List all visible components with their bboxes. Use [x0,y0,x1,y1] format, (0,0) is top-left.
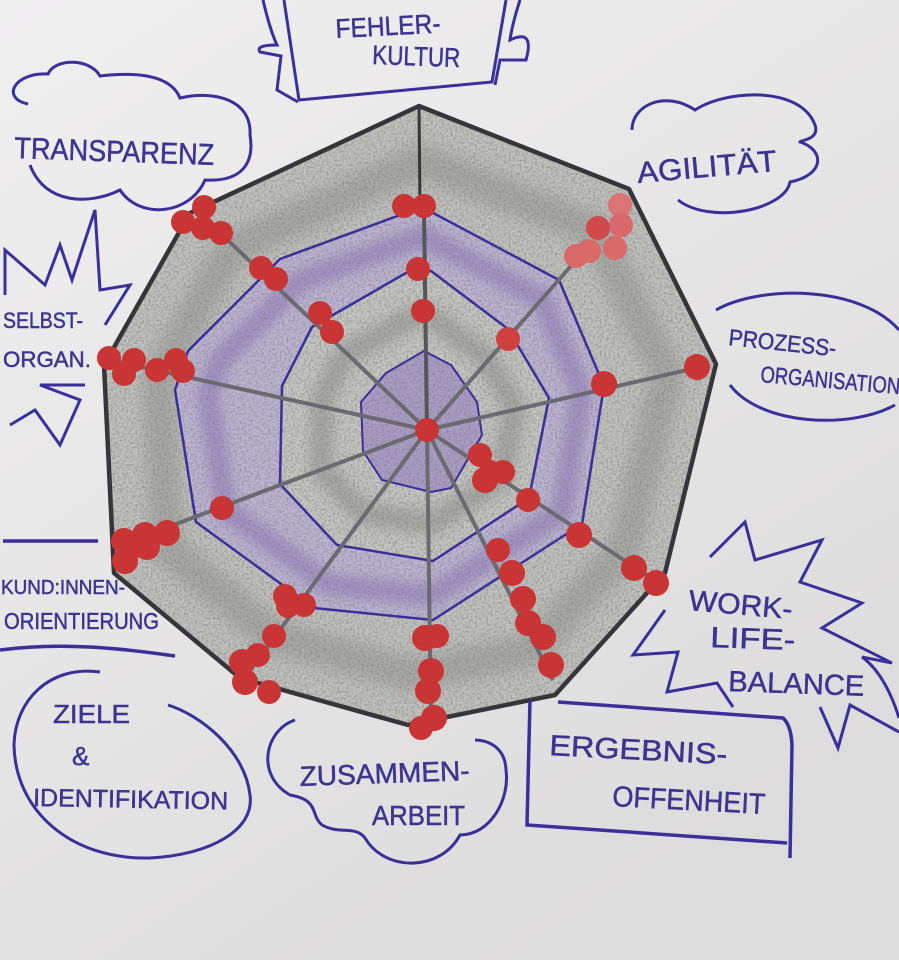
label: Ergebnisoffenheit: ERGEBNIS- [549,730,728,771]
label: Transparenz [13,62,251,210]
label: Work-Life-Balance: LIFE- [710,622,796,657]
pencil grain [100,100,720,730]
label: Ziele und Identifikation [14,671,250,858]
label: Selbstorganisation: SELBST- [3,308,83,333]
label: Agilität: AGILITÄT [636,145,778,190]
label: Prozessorganisation: PROZESS- [727,324,838,361]
label: Kund:innenorientierung: KUND:INNEN- [1,577,125,599]
label: Ziele und Identifikation: IDENTIFIKATION [33,784,228,815]
center purple area [361,351,482,492]
inner gray band [282,272,548,560]
purple band [176,213,601,618]
label: Zusammenarbeit [268,720,507,863]
red sticky dots [97,193,710,740]
label: Zusammenarbeit: ZUSAMMEN- [299,755,470,792]
label: Fehlerkultur: KULTUR [372,40,461,73]
label: Selbstorganisation: ORGAN. [3,347,91,372]
label: Zusammenarbeit: ARBEIT [372,800,465,831]
axes [110,106,700,725]
outer border [104,106,716,725]
label: Work-Life-Balance: WORK- [687,585,794,626]
label: Fehlerkultur: FEHLER- [335,9,441,44]
label: Ergebnisoffenheit [527,700,792,858]
label: Fehlerkultur [259,0,528,102]
label: Work-Life-Balance [633,522,899,748]
ring outlines [175,207,604,620]
label: Kund:innenorientierung [0,541,175,656]
outer gray band [106,109,714,722]
label: Agilität [632,95,818,213]
label: Ziele und Identifikation: ZIELE [53,699,130,729]
radar chart [90,90,730,740]
label: Work-Life-Balance: BALANCE [728,666,865,703]
label: Kund:innenorientierung: ORIENTIERUNG [4,608,159,634]
label: Ziele und Identifikation: & [72,741,89,771]
label: Ergebnisoffenheit: OFFENHEIT [612,781,766,821]
label: Selbstorganisation [3,210,130,445]
label: Prozessorganisation [716,293,899,420]
label: Transparenz: TRANSPARENZ [14,132,215,172]
